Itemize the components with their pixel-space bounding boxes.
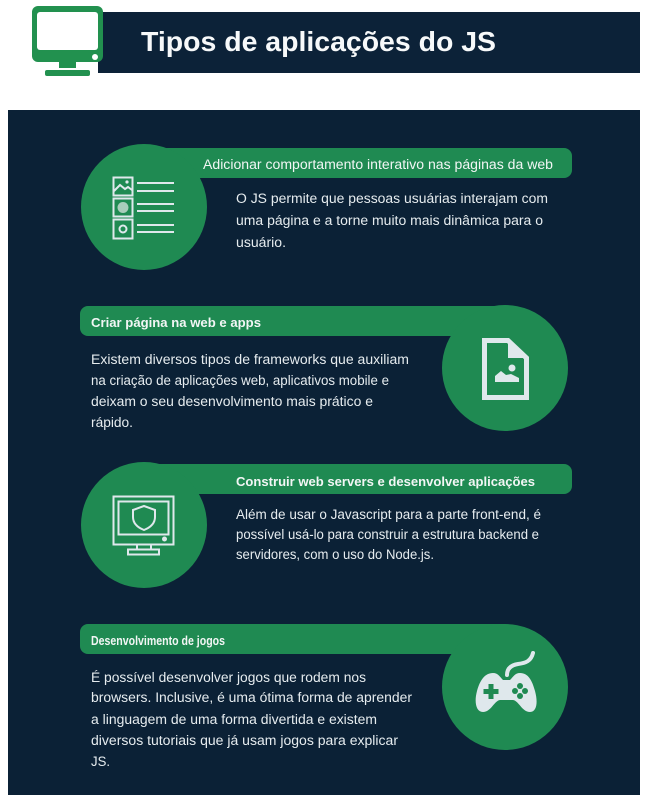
green heading bar and circle <box>80 305 568 431</box>
panel: web servers <box>81 462 572 588</box>
icon: image file <box>484 340 527 398</box>
description: Existem diversos tipos de frameworks que auxiliam <box>91 352 409 367</box>
description <box>91 352 409 430</box>
icon: green monitor <box>32 6 103 76</box>
green heading bar and circle <box>81 144 572 270</box>
description: possível usá-lo para construir a estrutura backend e <box>236 527 539 542</box>
panel: web pages and apps <box>80 305 568 431</box>
description: usuário. <box>236 235 286 250</box>
description: diversos tutoriais que já usam jogos para explicar <box>91 733 399 748</box>
description: browsers. Inclusive, é uma ótima forma de aprender <box>91 690 413 705</box>
heading: Criar página na web e apps <box>91 315 261 330</box>
description: JS. <box>91 754 110 769</box>
description: deixam o seu desenvolvimento mais prático e <box>91 394 373 409</box>
heading: Adicionar comportamento interativo nas páginas da web <box>203 157 553 172</box>
icon: content list <box>114 178 174 238</box>
description <box>236 191 548 250</box>
description: na criação de aplicações web, aplicativos mobile e <box>91 373 389 388</box>
panel: game development <box>80 624 568 769</box>
heading: Desenvolvimento de jogos <box>91 633 225 648</box>
description: Além de usar o Javascript para a parte front-end, é <box>236 507 541 522</box>
heading: Construir web servers e desenvolver aplicações <box>236 474 535 489</box>
title banner <box>98 12 640 73</box>
description: É possível desenvolver jogos que rodem nos <box>91 670 366 685</box>
green heading bar and circle <box>81 462 572 588</box>
description: servidores, com o uso do Node.js. <box>236 547 434 562</box>
description <box>236 507 541 562</box>
description: a linguagem de uma forma divertida e existem <box>91 712 377 727</box>
description: rápido. <box>91 415 133 430</box>
icon: monitor with shield <box>114 496 174 554</box>
description <box>91 670 413 769</box>
description: O JS permite que pessoas usuárias interajam com <box>236 191 548 206</box>
panel: interactive behaviour <box>81 144 572 270</box>
description: uma página e a torne muito mais dinâmica para o <box>236 213 543 228</box>
title: Tipos de aplicações do JS <box>141 26 496 57</box>
green heading bar and circle <box>80 624 568 750</box>
icon: game controller <box>476 653 537 712</box>
